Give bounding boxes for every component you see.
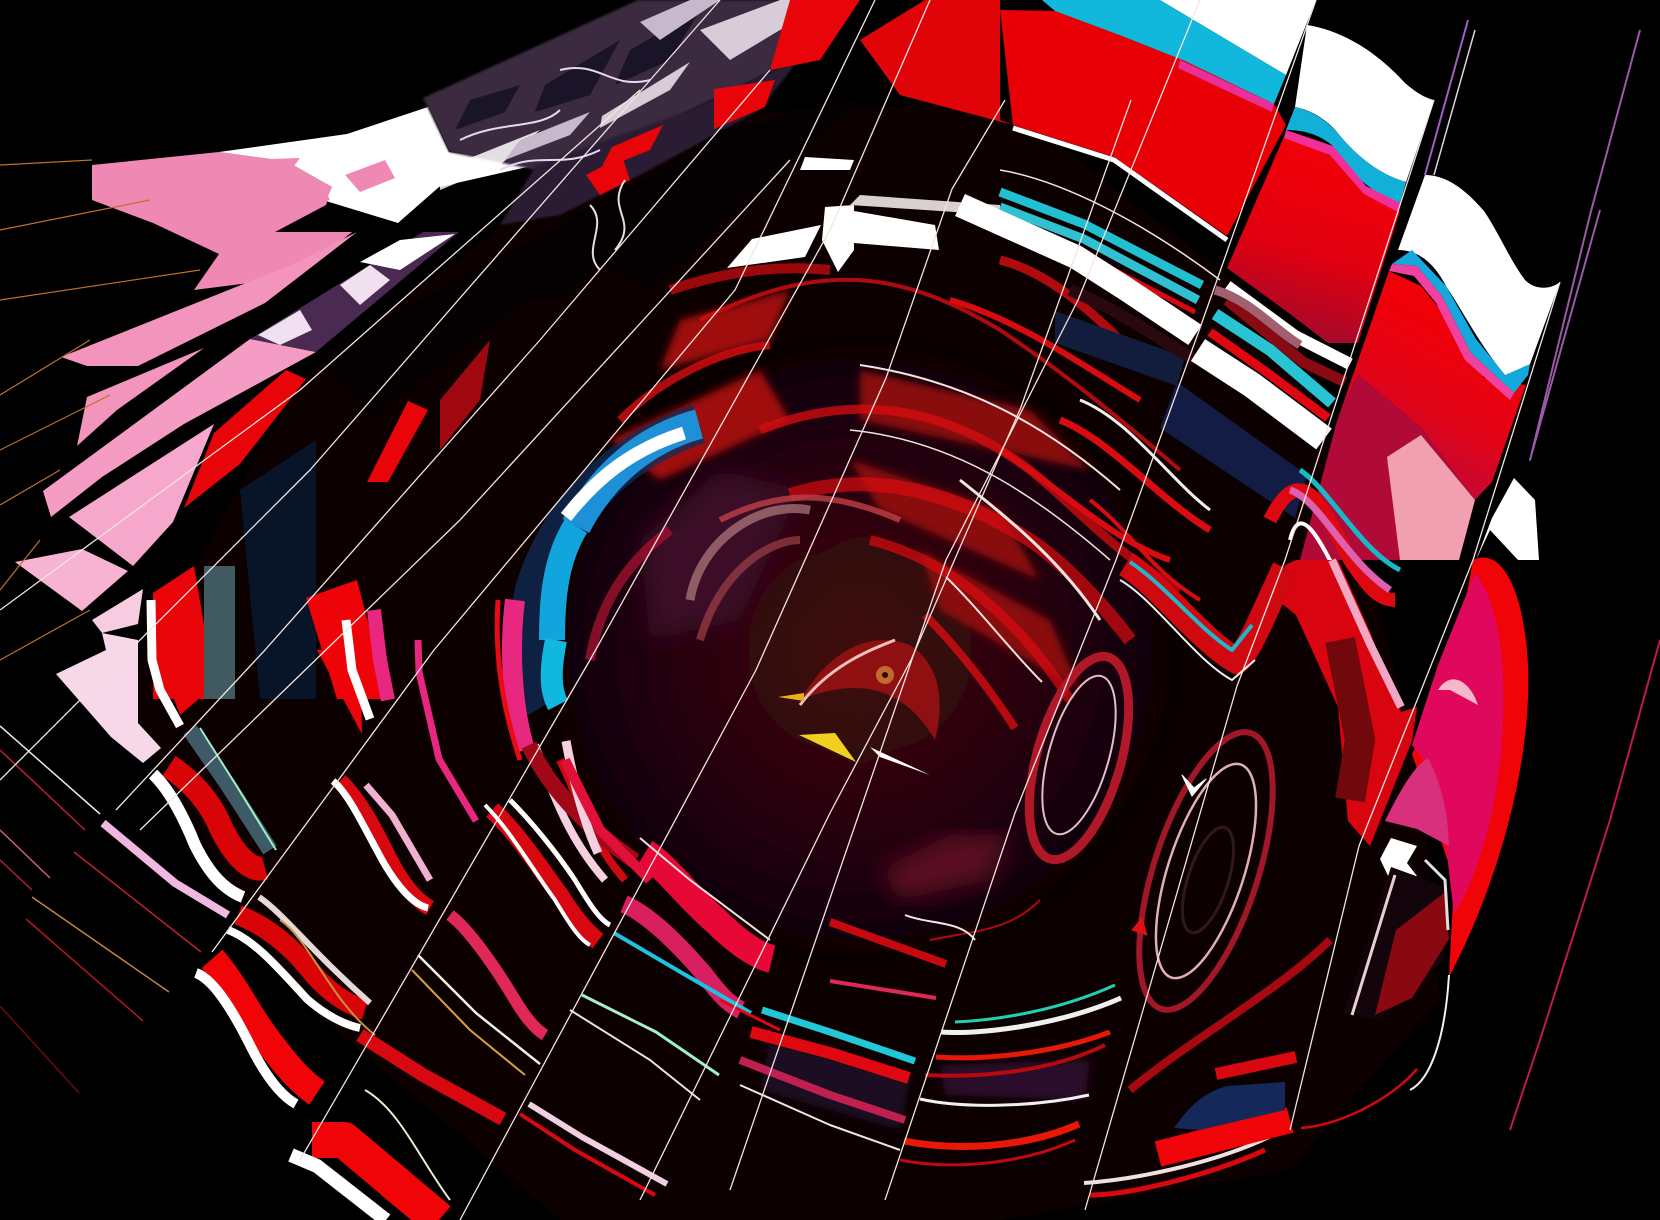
icon: small bird-like centre and yellow glints	[778, 640, 940, 775]
panel: chrome purple slats, top	[250, 0, 860, 352]
chart: concentric red streaks around the centre	[590, 260, 1210, 728]
panel: white glints upper middle	[727, 157, 1000, 272]
icon: white and cyan ribbon, upper right	[1042, 0, 1560, 560]
dark interior of the fan	[120, 100, 1440, 1220]
panel: striped bands under the red ribbon	[960, 128, 1400, 600]
icon: cyan blue arc	[497, 424, 699, 760]
panel: right side wavy red bands	[1120, 560, 1417, 846]
panel: pink fan, upper left	[0, 107, 536, 763]
icon: crimson orb on the right	[1343, 558, 1528, 1090]
panel: upper red area	[860, 0, 1526, 560]
panel: black slats fanning toward the top	[320, 100, 860, 420]
decorative thin right rays	[1425, 20, 1660, 1130]
panel: bottom wavy stripes	[0, 726, 1417, 1220]
icon: oval ripples lower right	[1010, 645, 1300, 1025]
icon: left red swirl	[151, 340, 635, 880]
